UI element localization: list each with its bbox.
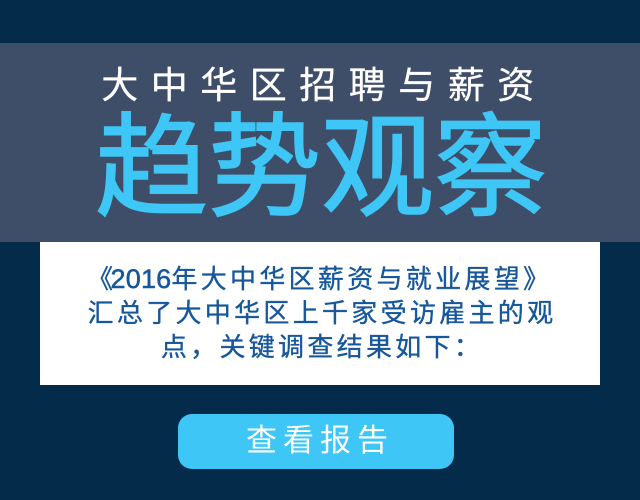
button: view report: 查看报告 bbox=[246, 423, 394, 458]
text block: intro paragraph: 点，关键调查结果如下： bbox=[161, 332, 483, 362]
text block: intro paragraph: 汇总了大中华区上千家受访雇主的观 bbox=[88, 298, 556, 328]
panel: header band bbox=[0, 43, 640, 242]
text block: intro paragraph: 《2016年大中华区薪资与就业展望》 bbox=[87, 264, 552, 294]
heading: subtitle: 大中华区招聘与薪资 bbox=[101, 65, 547, 106]
text block: intro paragraph bbox=[87, 264, 556, 362]
title: trend watch: 趋势观察 bbox=[95, 105, 547, 231]
button: view report bbox=[178, 414, 454, 469]
panel: intro text box bbox=[40, 242, 600, 385]
